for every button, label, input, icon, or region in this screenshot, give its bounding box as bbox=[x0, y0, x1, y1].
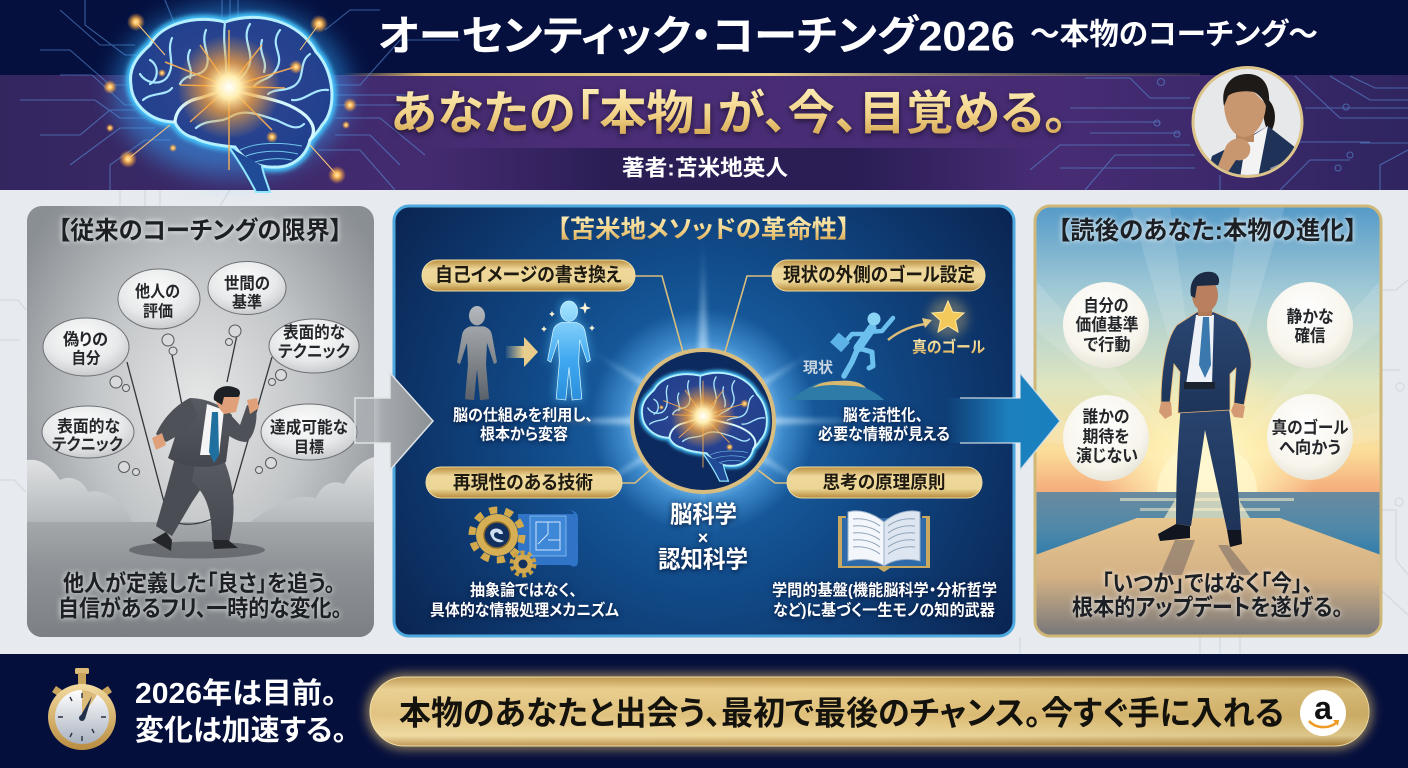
bubble: act on own values bbox=[1063, 282, 1149, 368]
figure: confident man in suit bbox=[1158, 272, 1251, 547]
panel caption bbox=[1072, 570, 1343, 620]
heading: 【従来のコーチングの限界】 bbox=[58, 216, 342, 245]
thought bubble: others' evaluation: 他人の bbox=[135, 282, 180, 301]
thought bubble: superficial technique lower: 表面的な bbox=[57, 417, 120, 436]
icon: amazon logo bbox=[1300, 690, 1346, 736]
panel: traditional coaching limits bbox=[27, 206, 374, 637]
header: purple band bbox=[0, 75, 1408, 190]
bubble: act on own values: 自分の bbox=[1084, 296, 1128, 316]
bubble: toward true goal: へ向かう bbox=[1279, 438, 1341, 458]
panel: you after reading bbox=[1035, 206, 1381, 636]
header: top navy band bbox=[0, 0, 1408, 75]
icon: gray person transforming to glowing person bbox=[457, 301, 595, 400]
bubble: quiet conviction: 静かな bbox=[1286, 308, 1334, 326]
bubble: act on own values: で行動 bbox=[1084, 336, 1130, 354]
pill: goal setting outside status quo: 現状の外側のゴール設定 bbox=[783, 263, 975, 286]
call-to-action button bbox=[366, 673, 1373, 750]
text: technique description bbox=[430, 580, 619, 620]
bubble: toward true goal: 真のゴール bbox=[1272, 418, 1349, 438]
label: true goal: 真のゴール bbox=[912, 338, 985, 356]
arrow: blue, from center to right panel bbox=[945, 373, 1060, 470]
bubble: quiet conviction bbox=[1267, 282, 1353, 368]
text: principles description: など)に基づく一生モノの知的武器 bbox=[773, 600, 995, 620]
thought bubble: achievable goals bbox=[256, 404, 357, 474]
thought bubble: false self: 自分 bbox=[72, 348, 100, 368]
center label: brain science x cognitive science bbox=[658, 502, 748, 574]
bubble: toward true goal bbox=[1267, 394, 1353, 480]
thought bubble: society's standards: 基準 bbox=[232, 292, 262, 312]
pill: reproducible technique: 再現性のある技術 bbox=[453, 472, 593, 493]
text: self-image description bbox=[453, 406, 593, 444]
thought bubble: society's standards bbox=[208, 262, 286, 346]
text: self-image description: 根本から変容 bbox=[480, 424, 568, 444]
text: goal description: 必要な情報が見える bbox=[818, 424, 950, 444]
header: author backing band bbox=[420, 148, 1040, 190]
thought bubble: false self: 偽りの bbox=[63, 330, 108, 349]
author portrait bbox=[1192, 66, 1304, 180]
center glow rays bbox=[555, 262, 849, 528]
panel caption: 自信があるフリ、一時的な変化。 bbox=[58, 595, 342, 621]
thought bubble: achievable goals: 達成可能な bbox=[270, 417, 348, 437]
thought bubble: superficial technique upper: テクニック bbox=[278, 342, 350, 361]
subtitle: 〜本物のコーチング〜 bbox=[1030, 18, 1318, 52]
text: principles description: 学問的基盤(機能脳科学・分析哲学 bbox=[772, 580, 997, 600]
icon: runner leaping to star bbox=[788, 298, 985, 400]
icon: open book bbox=[838, 511, 930, 572]
pill: principles of thinking bbox=[787, 467, 982, 498]
text: technique description: 具体的な情報処理メカニズム bbox=[430, 600, 619, 620]
thought bubble: others' evaluation bbox=[118, 269, 200, 355]
thought bubble: society's standards: 世間の bbox=[224, 274, 270, 293]
header: gold divider bbox=[340, 73, 1200, 76]
tagline: あなたの「本物」が、今、目覚める。 bbox=[390, 86, 1068, 140]
pill: self-image rewrite bbox=[422, 260, 635, 291]
thought bubble: superficial technique lower bbox=[42, 406, 140, 476]
puppet strings bbox=[127, 335, 272, 524]
header circuit lines bbox=[20, 0, 1408, 190]
title: オーセンティック・コーチング2026 bbox=[378, 12, 1015, 60]
figure: businessman on strings bbox=[129, 386, 265, 558]
text: principles description bbox=[772, 580, 997, 620]
center label: brain science x cognitive science: 脳科学 bbox=[670, 502, 737, 528]
center label: brain science x cognitive science: 認知科学 bbox=[658, 546, 748, 574]
thought bubble: superficial technique upper bbox=[268, 319, 359, 386]
arrow outline bbox=[960, 373, 1060, 470]
panel: Tomabechi method bbox=[394, 206, 1014, 636]
pill: reproducible technique bbox=[426, 467, 622, 498]
pill: principles of thinking: 思考の原理原則 bbox=[822, 472, 946, 492]
text: goal description bbox=[818, 406, 950, 444]
thought bubble: false self bbox=[43, 318, 130, 392]
pill: goal setting outside status quo bbox=[772, 260, 985, 291]
panel caption: 他人が定義した「良さ」を追う。 bbox=[63, 570, 335, 596]
icon: stopwatch bbox=[48, 668, 116, 750]
text: technique description: 抽象論ではなく、 bbox=[470, 580, 577, 600]
bubble: not playing others' expectations: 期待を bbox=[1082, 428, 1130, 446]
bubble: not playing others' expectations: 誰かの bbox=[1082, 408, 1130, 426]
footer message: 変化は加速する。 bbox=[135, 714, 347, 747]
floor bbox=[27, 522, 374, 637]
bubble: not playing others' expectations: 演じない bbox=[1076, 446, 1138, 466]
center label: brain science x cognitive science: × bbox=[698, 528, 708, 548]
arrow: gray, from left panel to center bbox=[355, 373, 433, 470]
icon: glowing brain with nodes bbox=[103, 4, 357, 192]
footer message bbox=[135, 677, 347, 747]
text: self-image description: 脳の仕組みを利用し、 bbox=[453, 406, 593, 424]
thought bubble: others' evaluation: 評価 bbox=[143, 302, 173, 320]
icon: amazon logo: a bbox=[1314, 690, 1332, 726]
center: brain medallion bbox=[632, 350, 774, 492]
heading: 【苫米地メソッドの革命性】 bbox=[557, 216, 850, 244]
thought bubble: superficial technique upper: 表面的な bbox=[283, 323, 345, 342]
bubble: not playing others' expectations bbox=[1063, 395, 1149, 481]
pill: self-image rewrite: 自己イメージの書き換え bbox=[435, 263, 622, 286]
label: status quo: 現状 bbox=[803, 358, 833, 376]
connector lines bbox=[622, 276, 787, 483]
panel caption: 「いつか」ではなく「今」、 bbox=[1102, 570, 1313, 596]
panel caption bbox=[58, 570, 342, 621]
thought bubble: superficial technique lower: テクニック bbox=[52, 435, 123, 454]
footer message: 2026年は目前。 bbox=[135, 677, 337, 710]
bubble: act on own values: 価値基準 bbox=[1076, 314, 1138, 334]
call-to-action button: 本物のあなたと出会う、最初で最後のチャンス。今すぐ手に入れる bbox=[399, 694, 1284, 732]
thought bubble: achievable goals: 目標 bbox=[294, 438, 324, 456]
icon: gears and blueprint bbox=[472, 510, 578, 575]
heading: 【読後のあなた:本物の進化】 bbox=[1058, 217, 1357, 245]
author: 著者:苫米地英人 bbox=[622, 156, 788, 180]
panel caption: 根本的アップデートを遂げる。 bbox=[1072, 594, 1343, 620]
footer band bbox=[0, 654, 1408, 768]
text: goal description: 脳を活性化、 bbox=[843, 406, 923, 424]
bubble: quiet conviction: 確信 bbox=[1294, 326, 1326, 346]
